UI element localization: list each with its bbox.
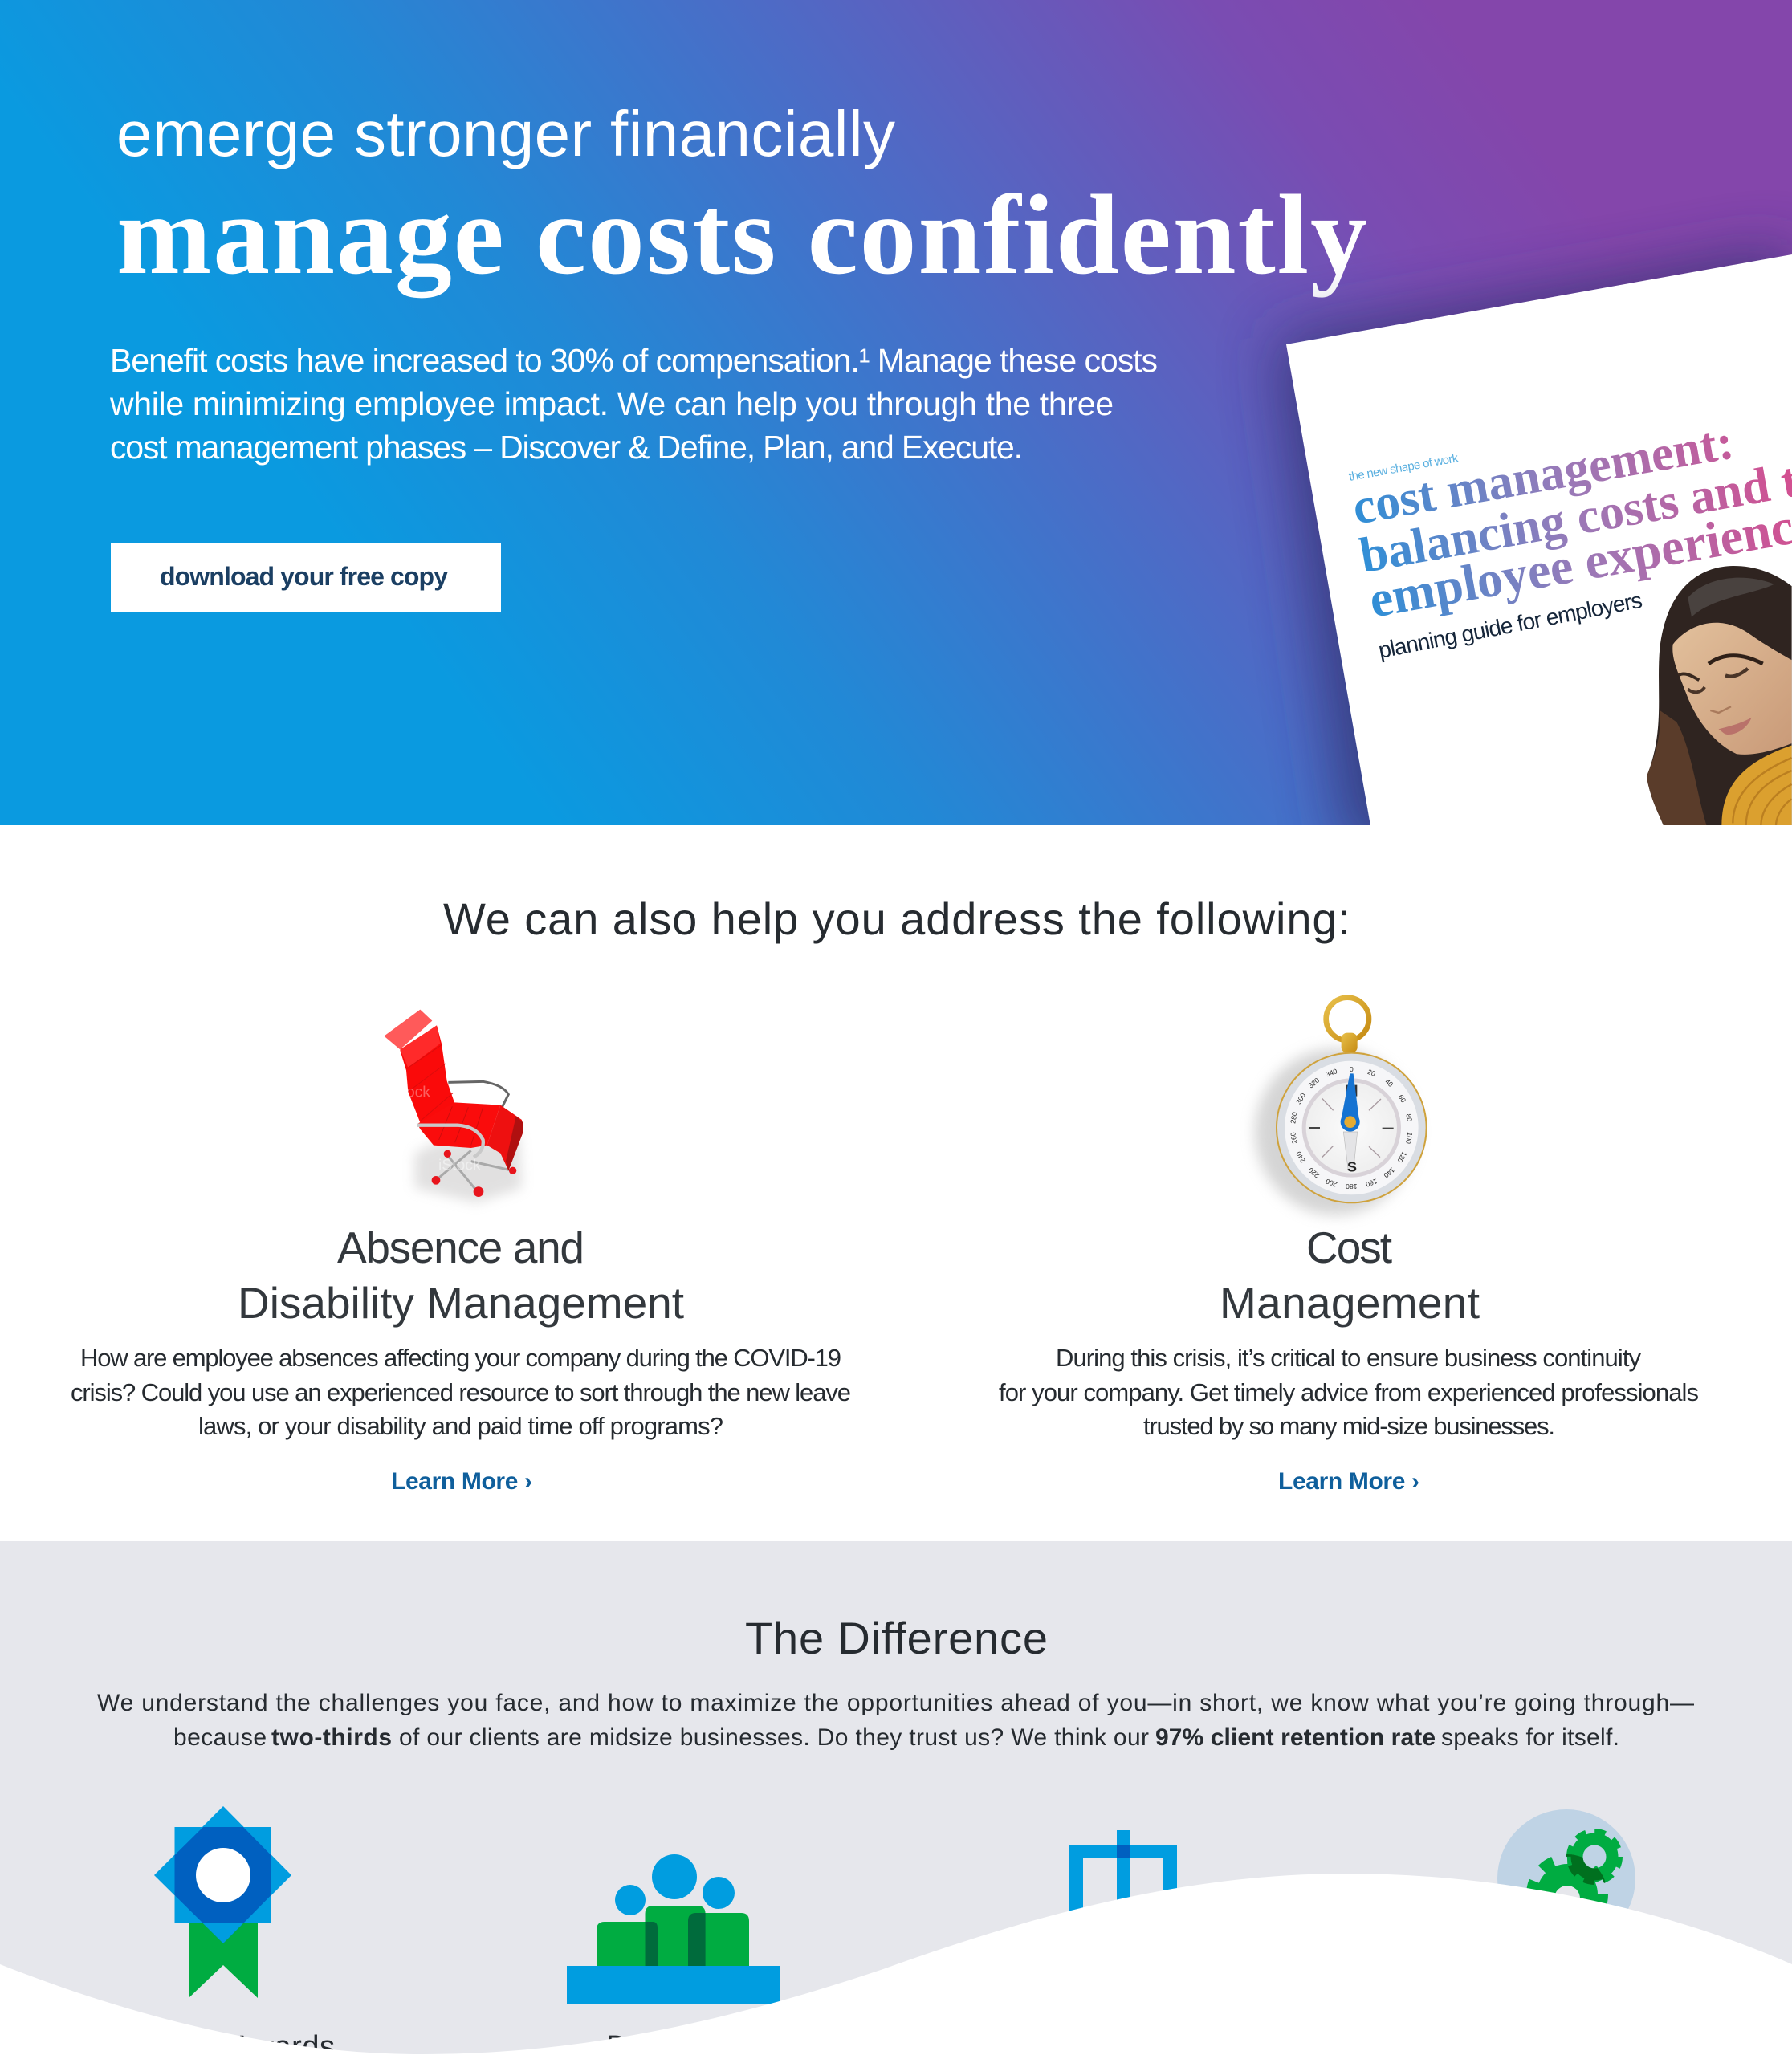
- hero subtitle: emerge stronger financially: [116, 98, 895, 169]
- text: difference description: speaks for itself.: [1441, 1724, 1619, 1751]
- icon: award ribbon: [154, 1806, 291, 1998]
- section heading: also help: We can also help you address the following:: [443, 893, 1350, 944]
- text: cost description: During this crisis, it’s critical to ensure business continuity: [1056, 1344, 1641, 1372]
- wave: white bottom edge: [0, 1874, 1792, 2055]
- hero description: cost management phases – Discover & Define, Plan, and Execute.: [110, 429, 1023, 466]
- image: compass: 320: [1307, 1076, 1321, 1090]
- text: cost description: [999, 1344, 1699, 1440]
- heading: cost management: Management: [1220, 1278, 1480, 1328]
- image: red office chair: iStock: [388, 1084, 430, 1101]
- image: compass: S: [1347, 1158, 1357, 1174]
- image: compass: 220: [1307, 1166, 1321, 1179]
- hero description: Benefit costs have increased to 30% of compensation.¹ Manage these costs: [110, 342, 1158, 379]
- image: compass: 140: [1382, 1166, 1396, 1179]
- guide cover: [1286, 254, 1792, 835]
- hero description: while minimizing employee impact. We can help you through the three: [109, 385, 1114, 422]
- image: compass: 0: [1350, 1065, 1354, 1073]
- image: compass: 40: [1383, 1077, 1395, 1089]
- heading: absence and disability: Absence and: [337, 1223, 584, 1272]
- image: compass: 340: [1325, 1067, 1338, 1079]
- image: compass: 80: [1404, 1113, 1414, 1122]
- column: cost management: [999, 998, 1699, 1495]
- text: absence description: laws, or your disability and paid time off programs?: [198, 1412, 723, 1440]
- image: compass: 300: [1294, 1092, 1307, 1105]
- hero description: [109, 342, 1158, 466]
- text: absence description: How are employee absences affecting your company during the COVID-19: [80, 1344, 841, 1372]
- guide title: cost management:: [1349, 414, 1737, 535]
- text: absence description: crisis? Could you use an experienced resource to sort through the new leave: [71, 1378, 851, 1406]
- column: absence and disability: [71, 1010, 851, 1495]
- heading: absence and disability: Disability Management: [238, 1278, 684, 1328]
- link: learn more: Learn More ›: [1278, 1468, 1419, 1495]
- image: red office chair: iStock: [438, 1157, 481, 1174]
- image: red office chair: [384, 1010, 523, 1202]
- image: compass: 160: [1365, 1177, 1379, 1189]
- text: difference description: because: [173, 1724, 267, 1751]
- text: difference description: We understand the challenges you face, and how to maximize the opportunities ahead of you—in short, we know what you’re going through—: [97, 1690, 1694, 1716]
- text: difference description: 97% client retention rate: [1155, 1724, 1436, 1751]
- guide subtitle: planning guide for employers: [1376, 588, 1644, 663]
- heading: cost management: [1220, 1223, 1480, 1328]
- download button: download your free copy: [160, 562, 448, 591]
- text: cost description: for your company. Get timely advice from experienced professionals: [999, 1378, 1699, 1406]
- text: absence description: [71, 1344, 851, 1440]
- image: compass: 100: [1404, 1132, 1414, 1145]
- icon: blue frame: [1069, 1830, 1177, 1959]
- guide kicker: the new shape of work: [1348, 451, 1460, 484]
- image: compass: 260: [1289, 1131, 1299, 1145]
- text: difference description: two-thirds: [271, 1724, 392, 1751]
- image: compass: 180: [1346, 1182, 1358, 1190]
- image: compass: 240: [1294, 1150, 1307, 1164]
- icon: gears: [1497, 1809, 1635, 1909]
- download button: [111, 543, 501, 612]
- guide cover shadow: [1277, 250, 1792, 851]
- text: cost description: trusted by so many mid-size businesses.: [1143, 1412, 1555, 1440]
- image: compass: 120: [1395, 1150, 1408, 1164]
- link: learn more: Learn More ›: [391, 1468, 532, 1495]
- heading: cost management: Cost: [1306, 1223, 1392, 1272]
- photo: woman with scarf: [1647, 566, 1792, 826]
- icon: group of people: [567, 1854, 780, 2004]
- image: compass: 20: [1366, 1068, 1377, 1078]
- heading: absence and disability: [238, 1223, 684, 1328]
- image: compass: 60: [1397, 1093, 1407, 1104]
- hero title: manage costs confidently: [116, 171, 1367, 298]
- heading: the difference: The Difference: [745, 1613, 1048, 1663]
- image: compass: 280: [1289, 1111, 1299, 1124]
- panel: hero banner: [0, 0, 1792, 851]
- image: compass: [1255, 998, 1427, 1215]
- panel: the difference: [0, 1541, 1792, 2055]
- text: difference description: [97, 1690, 1694, 1751]
- text: difference description: of our clients are midsize businesses. Do they trust us? We think our: [399, 1724, 1149, 1751]
- image: compass: 200: [1325, 1177, 1338, 1189]
